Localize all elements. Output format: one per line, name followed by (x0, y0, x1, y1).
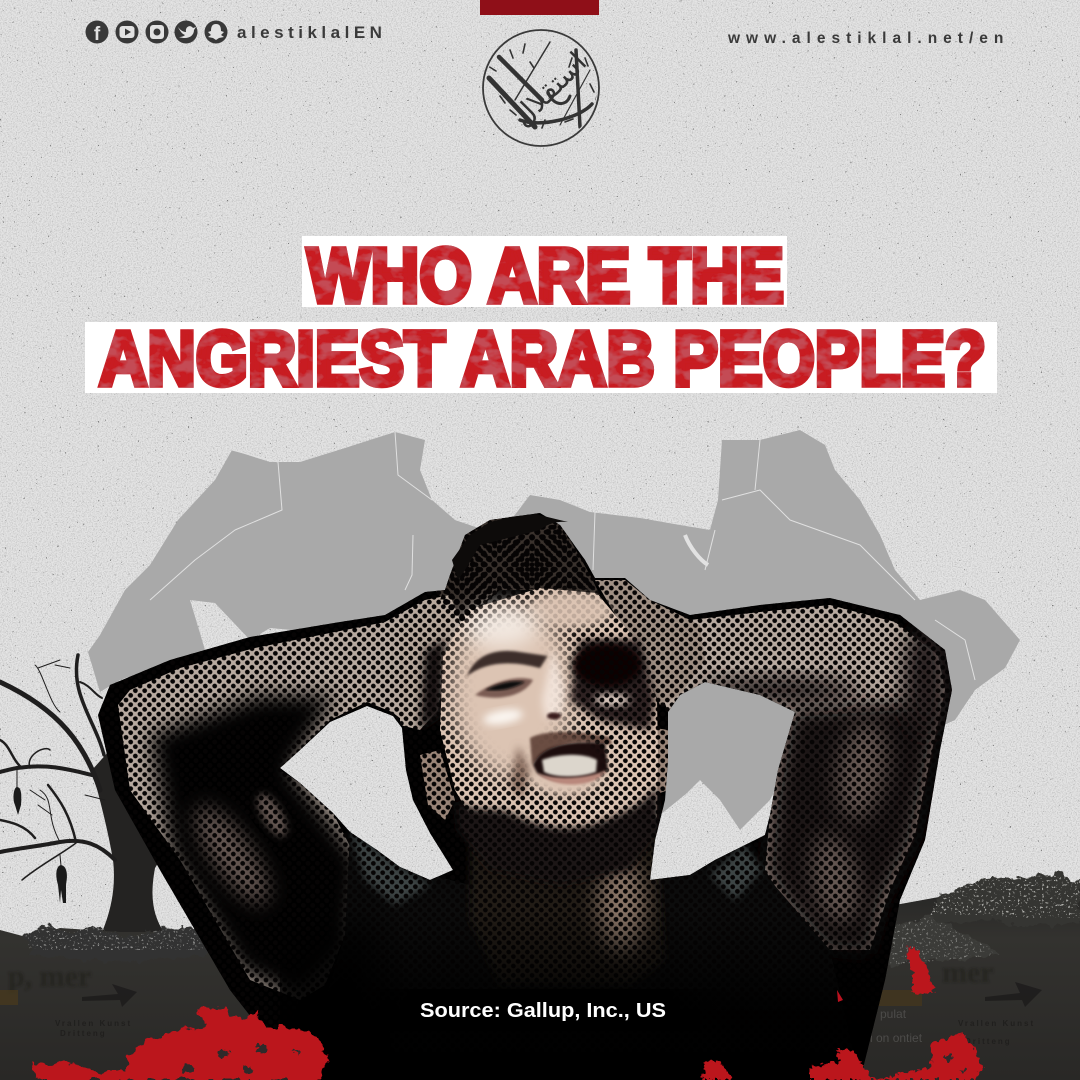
body silhouette (98, 513, 952, 1080)
icon: twitter (174, 20, 198, 44)
right cheek highlight (594, 694, 630, 706)
source band (340, 989, 740, 1031)
ear left (420, 750, 455, 820)
shirt right shoulder light (710, 845, 762, 900)
right upper arm highlight low (806, 832, 864, 928)
right elbow shadow (903, 625, 947, 735)
right splatter holes (945, 1054, 967, 1073)
hair (435, 515, 600, 620)
red splatter bottom bits (703, 1060, 733, 1080)
foliage right highlights (930, 873, 1080, 918)
red splatter left (30, 1007, 328, 1080)
newspaper scraps left: p, mer (8, 960, 91, 993)
right eye socket (572, 643, 642, 687)
website address: www.alestiklal.net/en (727, 30, 1009, 47)
neck highlight (598, 857, 646, 953)
nostril (547, 712, 561, 720)
foliage left (25, 925, 215, 962)
moustache (530, 732, 612, 765)
icon: snapchat (204, 20, 228, 44)
left arm fade (290, 900, 400, 1080)
hanging figure left (14, 787, 21, 815)
left eyebrow (467, 651, 548, 676)
shirt left shoulder light (350, 832, 430, 905)
nose highlight (542, 648, 565, 718)
foliage right lower (890, 917, 1000, 965)
red splatter dart (837, 990, 843, 1002)
splatter holes (182, 1045, 299, 1074)
title (85, 233, 997, 402)
red splatter small drip (907, 947, 935, 993)
halftone dots (80, 500, 980, 1080)
left arm shadow (150, 695, 360, 1000)
left hand (400, 595, 462, 730)
hanging figure right (56, 865, 67, 903)
icon: facebook: f (94, 24, 101, 45)
hair tuft (452, 514, 568, 580)
body fade to black (280, 910, 900, 1080)
social icons row (86, 20, 228, 45)
left upper arm highlight small (251, 789, 293, 841)
left upper arm highlight (182, 796, 282, 914)
source text: Source: Gallup, Inc., US (420, 1000, 666, 1022)
title line 1: WHO ARE THE (307, 233, 784, 319)
halftone dots hair (440, 525, 595, 625)
angry man halftone figure (80, 500, 980, 1080)
right face shadow (570, 640, 655, 730)
lower lip (537, 770, 607, 785)
teeth (542, 755, 597, 776)
ear right (657, 728, 668, 793)
newspaper scraps right: pulat (880, 1007, 907, 1021)
right forearm shadow (700, 678, 860, 702)
right arm (664, 605, 945, 950)
left eye slit (485, 681, 525, 691)
red splatter right (810, 1033, 983, 1080)
torso shirt (345, 832, 830, 950)
right upper arm dark (765, 700, 945, 955)
newspaper scraps left (0, 960, 137, 1038)
icon: youtube (116, 20, 138, 44)
ground band (0, 873, 1080, 1080)
neck (470, 830, 665, 985)
newspaper scraps right: Vrallen Kunst (958, 1019, 1035, 1028)
red top tab (480, 0, 599, 15)
social handle: alestiklalEN (237, 23, 386, 42)
icon: instagram (146, 20, 168, 44)
logo emblem: استقلال (505, 45, 593, 133)
skin tones clipped to silhouette (80, 500, 980, 1080)
newspaper scraps right: fhi on ontiet (860, 1031, 923, 1045)
left cheek highlight (482, 707, 524, 727)
right hand (595, 580, 705, 705)
newspaper scraps right (860, 956, 1042, 1046)
newspaper scraps left: Dritteng (60, 1029, 107, 1038)
foliage left highlights (25, 925, 215, 950)
icon: facebook (86, 20, 108, 45)
beard (455, 785, 660, 885)
left arm (118, 600, 455, 1000)
foliage right (930, 873, 1080, 925)
mouth (533, 742, 608, 781)
bare tree with hanging figures (0, 655, 165, 937)
foliage right lower highlights (890, 917, 1000, 965)
newspaper scraps right: Dritteng (965, 1037, 1012, 1046)
left hand shadow (420, 640, 445, 730)
stubble (510, 745, 530, 800)
right upper arm highlight (830, 717, 894, 823)
newspaper scraps left: Vrallen Kunst (55, 1019, 132, 1028)
face skin (440, 588, 658, 834)
logo emblem (483, 30, 599, 146)
red sea (685, 535, 708, 565)
map of the Arab world (88, 430, 1020, 830)
forehead highlight (462, 603, 538, 647)
newspaper scraps right: mer (942, 956, 994, 989)
left eye (475, 678, 533, 698)
